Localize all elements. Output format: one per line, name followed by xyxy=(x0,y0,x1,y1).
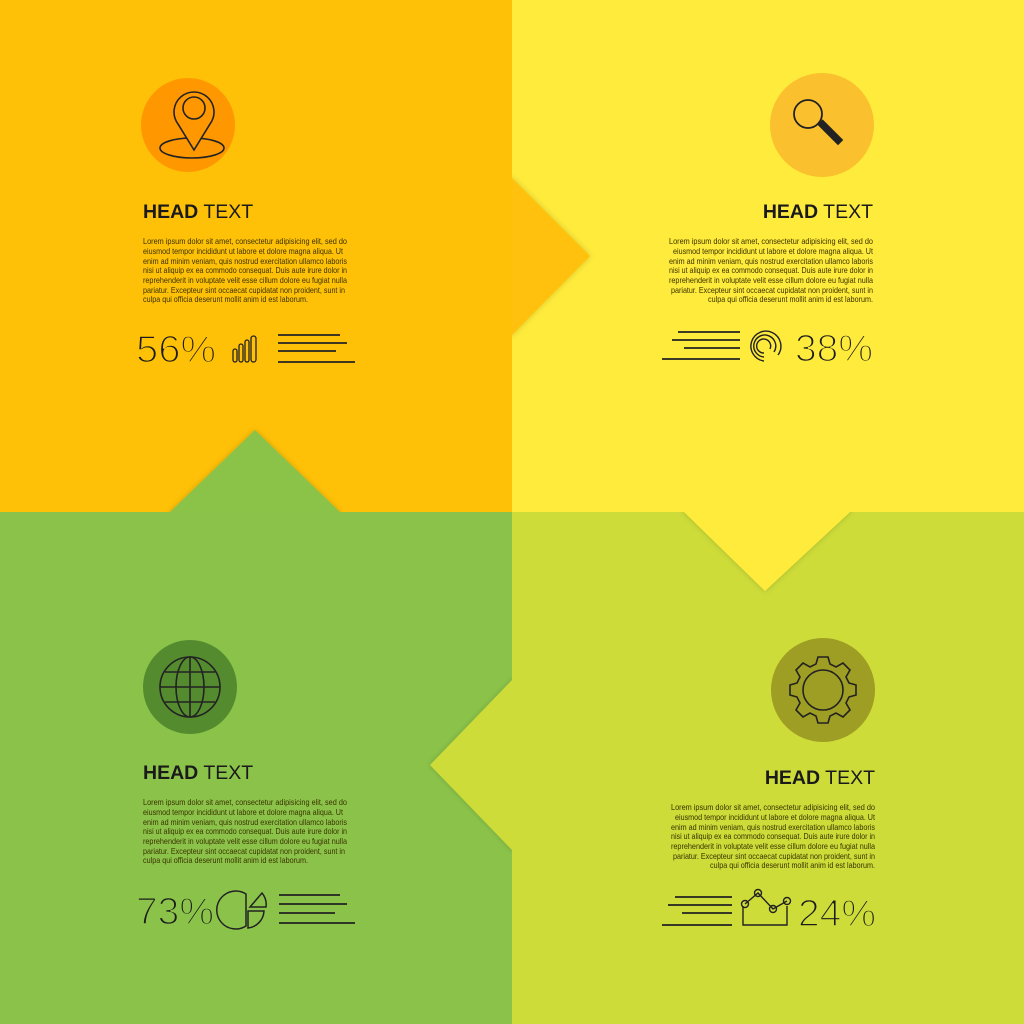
icon: line chart xyxy=(742,890,790,925)
icon: text lines right xyxy=(662,332,740,359)
text block: top-left: nisi ut aliquip ex ea commodo consequat. Duis aute irure dolor in xyxy=(143,265,347,275)
text block: top-left: pariatur. Excepteur sint occaecat cupidatat non proident, sunt in xyxy=(143,285,345,295)
stat: 56%: 56% xyxy=(136,329,216,371)
text block: top-left: eiusmod tempor incididunt ut labore et dolore magna aliqua. Ut xyxy=(143,246,344,256)
text block: top-right xyxy=(669,236,874,304)
stat: 38%: 38% xyxy=(795,328,873,370)
icon: magnifier xyxy=(770,73,874,177)
icon: text lines xyxy=(278,335,355,362)
stat: 73%: 73% xyxy=(136,891,214,933)
text block: top-right: pariatur. Excepteur sint occaecat cupidatat non proident, sunt in xyxy=(671,285,873,295)
text block: bottom-right: reprehenderit in voluptate velit esse cillum dolore eu fugiat nulla xyxy=(671,841,875,851)
text block: bottom-right xyxy=(671,802,876,870)
icon: globe xyxy=(143,640,237,734)
text block: bottom-left: pariatur. Excepteur sint occaecat cupidatat non proident, sunt in xyxy=(143,846,345,856)
heading: top-left: HEAD TEXT xyxy=(143,201,253,223)
text block: top-right: nisi ut aliquip ex ea commodo consequat. Duis aute irure dolor in xyxy=(669,265,873,275)
text block: bottom-left xyxy=(143,797,347,865)
text block: top-right: enim ad minim veniam, quis nostrud exercitation ullamco laboris xyxy=(669,256,873,266)
text block: bottom-right: nisi ut aliquip ex ea commodo consequat. Duis aute irure dolor in xyxy=(671,831,875,841)
text block: bottom-right: eiusmod tempor incididunt ut labore et dolore magna aliqua. Ut xyxy=(675,812,876,822)
text block: bottom-left: culpa qui officia deserunt mollit anim id est laborum. xyxy=(143,855,308,865)
text block: bottom-right: culpa qui officia deserunt mollit anim id est laborum. xyxy=(710,860,875,870)
text block: bottom-left: enim ad minim veniam, quis nostrud exercitation ullamco laboris xyxy=(143,817,347,827)
arrow: lime pointing left xyxy=(430,680,520,850)
text block: bottom-left: eiusmod tempor incididunt ut labore et dolore magna aliqua. Ut xyxy=(143,807,344,817)
panel: green bottom-left xyxy=(0,512,512,1024)
text block: top-left: enim ad minim veniam, quis nostrud exercitation ullamco laboris xyxy=(143,256,347,266)
text block: bottom-right: Lorem ipsum dolor sit amet, consectetur adipisicing elit, sed do xyxy=(671,802,875,812)
text block: top-right: culpa qui officia deserunt mollit anim id est laborum. xyxy=(708,294,873,304)
icon: map pin xyxy=(141,78,235,172)
icon: arc gauge xyxy=(751,331,781,361)
icon: bar chart xyxy=(233,336,256,362)
heading: bottom-right: HEAD TEXT xyxy=(765,767,875,789)
text block: bottom-right: enim ad minim veniam, quis nostrud exercitation ullamco laboris xyxy=(671,822,875,832)
arrow: green pointing up xyxy=(170,430,340,520)
text block: bottom-left: reprehenderit in voluptate velit esse cillum dolore eu fugiat nulla xyxy=(143,836,347,846)
text block: top-right: eiusmod tempor incididunt ut labore et dolore magna aliqua. Ut xyxy=(673,246,874,256)
panel: lime bottom-right xyxy=(512,512,1024,1024)
text block: bottom-left: nisi ut aliquip ex ea commodo consequat. Duis aute irure dolor in xyxy=(143,826,347,836)
text block: bottom-left: Lorem ipsum dolor sit amet, consectetur adipisicing elit, sed do xyxy=(143,797,347,807)
text block: top-left: culpa qui officia deserunt mollit anim id est laborum. xyxy=(143,294,308,304)
icon: text lines bottom-right xyxy=(662,897,732,925)
heading: top-right: HEAD TEXT xyxy=(763,201,873,223)
icon: gear xyxy=(771,638,875,742)
text block: top-left: reprehenderit in voluptate velit esse cillum dolore eu fugiat nulla xyxy=(143,275,347,285)
arrow: yellow pointing down xyxy=(684,500,850,591)
text block: top-right: reprehenderit in voluptate velit esse cillum dolore eu fugiat nulla xyxy=(669,275,873,285)
icon: pie chart xyxy=(217,891,266,929)
panel: orange top-left xyxy=(0,0,512,512)
arrow: orange pointing right xyxy=(500,178,590,335)
text block: bottom-right: pariatur. Excepteur sint occaecat cupidatat non proident, sunt in xyxy=(673,851,875,861)
heading: bottom-left: HEAD TEXT xyxy=(143,762,253,784)
text block: top-left: Lorem ipsum dolor sit amet, consectetur adipisicing elit, sed do xyxy=(143,236,347,246)
stat: 24%: 24% xyxy=(798,893,876,935)
panel: yellow top-right xyxy=(512,0,1024,512)
text block: top-right: Lorem ipsum dolor sit amet, consectetur adipisicing elit, sed do xyxy=(669,236,873,246)
text block: top-left xyxy=(143,236,347,304)
icon: text lines bottom-left xyxy=(279,895,355,923)
